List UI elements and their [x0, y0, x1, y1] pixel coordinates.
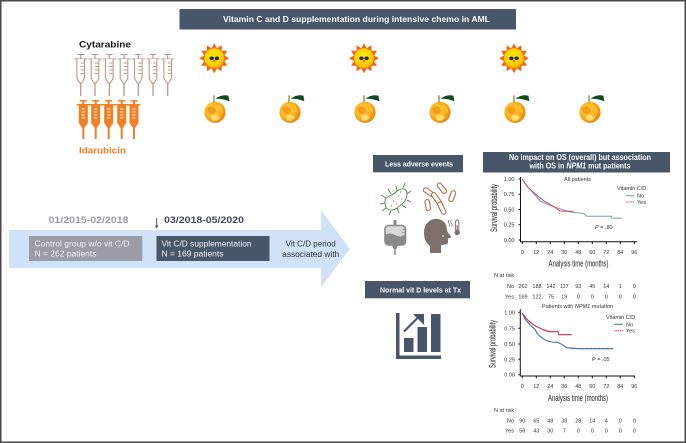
x tick labels: 24: [547, 250, 553, 256]
x tick labels: 72: [603, 250, 609, 256]
table: numbers at risk, all patients: 1: [619, 284, 622, 290]
box: control group: Control group w/o vit C/D: [34, 239, 130, 248]
text: period association: associated with: [282, 250, 339, 259]
table: numbers at risk, all patients: N at risk: [494, 273, 514, 279]
icon: rod bacteria: [423, 182, 456, 215]
censor marks: no vitamin: [571, 348, 611, 350]
x tick labels: [521, 250, 637, 256]
chart title: Patients with NPM1 mutation: [542, 304, 613, 310]
icons: oranges (vitamin C): [204, 95, 604, 123]
table: numbers at risk, all patients: 169: [518, 295, 528, 301]
x tick labels: 60: [589, 250, 595, 256]
y axis title: Survival probability: [488, 320, 498, 368]
y tick labels: 0.50: [504, 208, 514, 214]
table: numbers at risk, all patients: 0: [633, 295, 636, 301]
table: numbers at risk, all patients: 142: [546, 284, 556, 290]
table: numbers at risk, all patients: 122: [532, 295, 542, 301]
x tick labels: 12: [533, 250, 539, 256]
legend: [617, 186, 646, 206]
heading: normal vit D levels: [365, 281, 470, 298]
table: numbers at risk, NPM1 mutation: 0: [591, 428, 594, 434]
text: period association: [282, 239, 339, 259]
table: numbers at risk, all patients: 19: [561, 295, 567, 301]
x tick labels: 96: [631, 384, 637, 390]
table: numbers at risk, NPM1 mutation: 0: [619, 428, 622, 434]
box: control group: [29, 236, 142, 261]
y tick labels: 1.00: [504, 177, 514, 183]
p value: P = .80: [595, 225, 613, 231]
table: numbers at risk, all patients: Yes: [505, 295, 514, 301]
table: numbers at risk, NPM1 mutation: 0: [577, 428, 580, 434]
icon: head with fever: [424, 219, 460, 253]
table: numbers at risk, NPM1 mutation: 0: [605, 428, 608, 434]
table: numbers at risk, all patients: 14: [603, 284, 609, 290]
date: supplementation period: 03/2018-05/2020: [164, 215, 244, 225]
axis titles: Analysis time (months): [548, 393, 608, 403]
table: numbers at risk, all patients: 75: [548, 295, 554, 301]
y tick labels: 0.50: [504, 342, 515, 348]
y tick labels: 0.75: [504, 326, 515, 332]
axes: [518, 309, 635, 378]
table: numbers at risk, all patients: 93: [575, 284, 581, 290]
icon: cytarabine syringes: [74, 54, 174, 96]
curve: vitamin: [522, 313, 572, 335]
icon: idarubicin syringes: [77, 100, 140, 139]
box: supplementation group: Vit C/D supplementation: [162, 239, 252, 248]
x tick labels: 84: [617, 384, 623, 390]
legend: Yes: [626, 329, 635, 335]
table: numbers at risk, NPM1 mutation: [494, 408, 636, 434]
chart: all patients survival: [489, 177, 646, 268]
y tick labels: 1.00: [504, 310, 515, 316]
x tick labels: 72: [603, 384, 609, 390]
timeline arrow: [9, 210, 350, 288]
heading: OS impact: with OS in NPM1 mut patients: [529, 162, 631, 171]
table: numbers at risk, all patients: 0: [577, 295, 580, 301]
axes: [518, 177, 637, 244]
table: numbers at risk, NPM1 mutation: 14: [589, 418, 595, 424]
table: numbers at risk, NPM1 mutation: 0: [619, 418, 622, 424]
text: period association: Vit C/D period: [286, 239, 336, 248]
table: numbers at risk, all patients: 0: [633, 284, 636, 290]
curve: no vitamin: [522, 179, 622, 218]
table: numbers at risk, NPM1 mutation: 4: [605, 418, 608, 424]
label: Idarubicin: Idarubicin: [79, 145, 126, 155]
x tick labels: 12: [533, 384, 539, 390]
title bar: [180, 9, 516, 30]
table: numbers at risk, NPM1 mutation: 0: [633, 418, 636, 424]
table: numbers at risk, all patients: [494, 273, 636, 301]
table: numbers at risk, all patients: No: [507, 284, 514, 290]
icon: bacterium: [380, 183, 411, 215]
table: numbers at risk, NPM1 mutation: 0: [633, 428, 636, 434]
icon: start arrow: [155, 218, 158, 228]
x tick labels: 60: [589, 384, 595, 390]
date: control period: 01/2015-02/2018: [48, 215, 128, 225]
table: numbers at risk, NPM1 mutation: No: [507, 418, 514, 424]
y tick labels: 0.75: [504, 192, 514, 198]
table: numbers at risk, NPM1 mutation: 56: [519, 428, 525, 434]
p value: P = .05: [592, 357, 610, 363]
y tick labels: 0.25: [504, 223, 514, 229]
legend: Vitamin C/D: [617, 186, 646, 192]
heading: less adverse events: [373, 155, 463, 172]
axis titles: Analysis time (months): [548, 258, 608, 268]
table: numbers at risk, NPM1 mutation: 38: [561, 418, 567, 424]
x tick labels: [521, 384, 637, 390]
curve: no vitamin: [522, 313, 613, 349]
table: numbers at risk, all patients: 188: [532, 284, 542, 290]
x tick labels: 0: [521, 384, 524, 390]
y tick labels: 0.00: [504, 238, 514, 244]
chart title: All patients: [564, 177, 591, 183]
x tick labels: 84: [617, 250, 623, 256]
legend: No: [626, 322, 633, 328]
table: numbers at risk, NPM1 mutation: 48: [547, 418, 553, 424]
y tick labels: 0.00: [504, 373, 515, 379]
y tick labels: [504, 310, 515, 379]
table: numbers at risk, NPM1 mutation: 30: [547, 428, 553, 434]
heading: normal vit D levels: Normal vit D levels at Tx: [380, 286, 462, 295]
table: numbers at risk, NPM1 mutation: 90: [519, 418, 525, 424]
x tick labels: 0: [521, 250, 524, 256]
icons: suns (vitamin D): [199, 43, 529, 73]
heading: OS impact: [483, 152, 670, 172]
icon: infusion bag: [385, 220, 406, 255]
label: Cytarabine: Cytarabine: [79, 40, 131, 50]
x tick labels: 24: [547, 384, 553, 390]
box: supplementation group: [156, 236, 270, 261]
legend: Vitamin C/D: [606, 315, 635, 321]
x tick labels: 36: [561, 384, 567, 390]
legend: No: [637, 194, 644, 200]
x tick labels: 96: [631, 250, 637, 256]
y tick labels: 0.25: [504, 357, 515, 363]
table: numbers at risk, all patients: 117: [560, 284, 569, 290]
x tick labels: 36: [561, 250, 567, 256]
box: supplementation group: N = 169 patients: [162, 250, 224, 259]
table: numbers at risk, all patients: 45: [589, 284, 595, 290]
x tick labels: 48: [575, 384, 581, 390]
box: control group: N = 262 patients: [34, 250, 96, 259]
icon: rising bar chart: [396, 313, 441, 359]
table: numbers at risk, all patients: 262: [518, 284, 528, 290]
table: numbers at risk, NPM1 mutation: 7: [563, 428, 566, 434]
table: numbers at risk, NPM1 mutation: Yes: [505, 428, 514, 434]
y axis title: Survival probability: [489, 184, 499, 232]
table: numbers at risk, NPM1 mutation: 65: [533, 418, 539, 424]
curve: vitamin: [522, 179, 573, 211]
table: numbers at risk, all patients: 0: [591, 295, 594, 301]
legend: Yes: [637, 200, 646, 206]
heading: OS impact: No impact on OS (overall) but association: [509, 153, 651, 162]
table: numbers at risk, all patients: 0: [619, 295, 622, 301]
title bar: Vitamin C and D supplementation during intensive chemo in AML: [223, 15, 490, 24]
chart: NPM1 mutation survival: [488, 304, 637, 403]
x tick labels: 48: [575, 250, 581, 256]
table: numbers at risk, NPM1 mutation: N at risk: [494, 408, 514, 414]
table: numbers at risk, NPM1 mutation: 43: [533, 428, 539, 434]
table: numbers at risk, all patients: 0: [605, 295, 608, 301]
table: numbers at risk, NPM1 mutation: 28: [575, 418, 581, 424]
legend: [606, 315, 635, 335]
y tick labels: [504, 177, 514, 244]
heading: less adverse events: Less adverse events: [385, 159, 453, 168]
